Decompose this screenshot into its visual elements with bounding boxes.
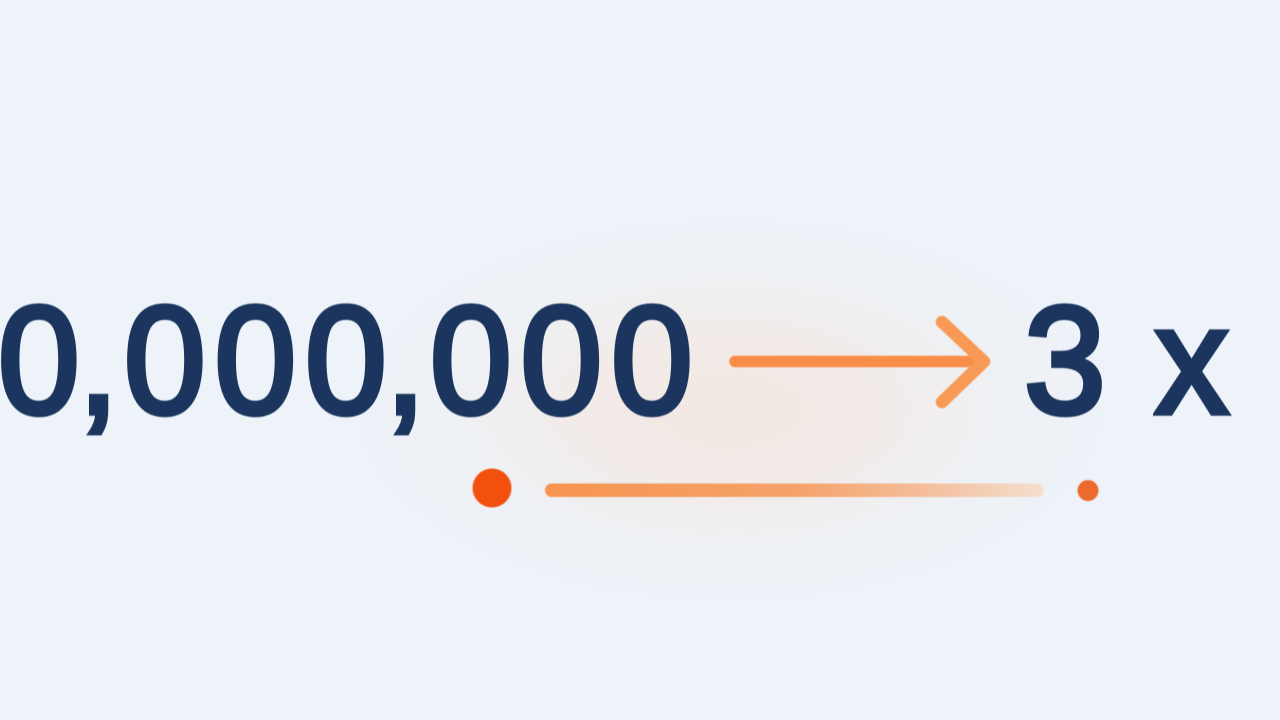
multiplier text	[1024, 275, 1237, 446]
background glow	[340, 210, 1120, 610]
large number text: 000	[430, 275, 702, 446]
icon: arrow	[728, 315, 991, 409]
large number text: 000	[124, 275, 396, 446]
multiplier text: x	[1155, 275, 1237, 446]
progress line with dots	[472, 468, 1100, 508]
large number text: 0	[0, 275, 89, 446]
large number text	[0, 275, 702, 446]
large number text: ,	[78, 275, 128, 446]
large number text: ,	[385, 275, 435, 446]
multiplier text: 3	[1024, 275, 1115, 446]
